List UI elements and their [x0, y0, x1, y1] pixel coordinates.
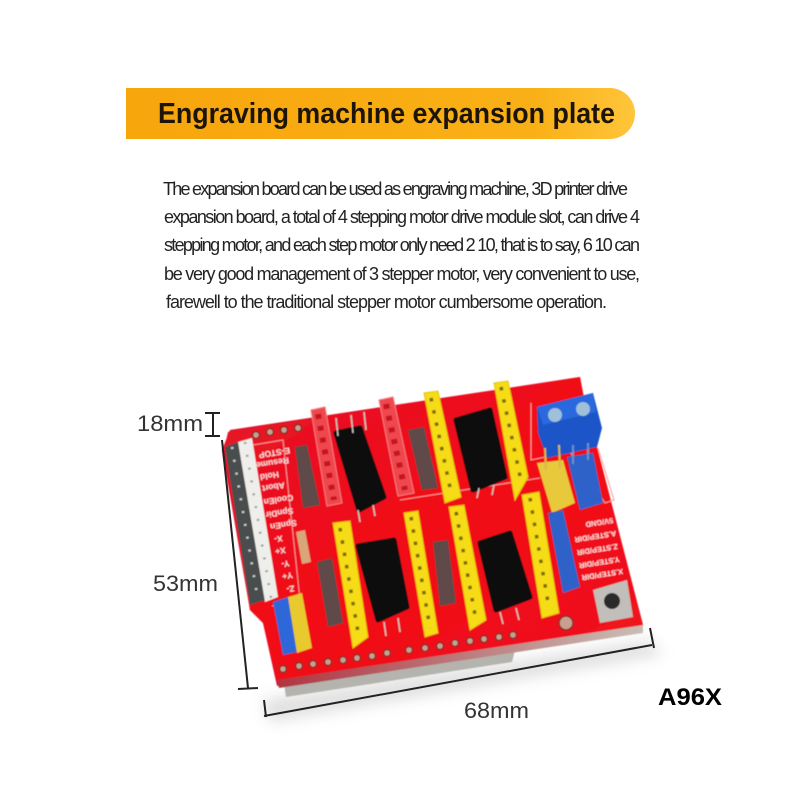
dimension: 68mm: 68mm [464, 698, 529, 723]
endstop silkscreen labels: X+ [274, 545, 287, 557]
dimension: 53mm [153, 440, 258, 689]
description paragraph: stepping motor, and each step motor only need 2 10, that is to say, 6 10 can [164, 235, 640, 255]
left grey header [225, 442, 265, 605]
small dark header 1 [295, 445, 320, 508]
description paragraph: farewell to the traditional stepper motor cumbersome operation. [166, 292, 607, 312]
endstop silkscreen labels: Hold [259, 470, 280, 482]
step dir silkscreen labels: Z.STEP/DIR [576, 542, 618, 557]
endstop silkscreen labels: Y+ [281, 570, 294, 582]
blue pin block lower [548, 510, 580, 593]
description paragraph [163, 179, 640, 312]
small dark header 4 [433, 540, 456, 606]
blue pin block upper [567, 453, 603, 510]
endstop silkscreen labels: Z- [286, 583, 295, 595]
small dark header 3 [317, 558, 343, 627]
upright pins [545, 443, 588, 470]
yellow pin block [537, 460, 575, 513]
pink headers [311, 397, 414, 506]
left white header [238, 438, 278, 602]
bottom yellow header [288, 593, 312, 653]
description paragraph: expansion board, a total of 4 stepping motor drive module slot, can drive 4 [164, 207, 640, 227]
dimension: 53mm: 53mm [153, 571, 218, 596]
endstop silkscreen labels: Abort [261, 480, 285, 494]
bottom pins [284, 650, 515, 697]
dimension: 68mm [264, 628, 654, 723]
board shadow [262, 640, 662, 722]
driver pins [336, 412, 519, 636]
pcb bottom edge [277, 625, 643, 688]
title banner: Engraving machine expansion plate [158, 98, 615, 130]
silkscreen frames [253, 403, 614, 606]
PCB [222, 377, 643, 686]
step dir silkscreen labels: Y.STEP/DIR [578, 555, 620, 570]
description paragraph: be very good management of 3 stepper motor, very convenient to use, [164, 264, 640, 284]
step dir silkscreen labels: A.STEP/DIR [573, 529, 617, 544]
reset button [593, 580, 633, 623]
endstop silkscreen labels: Y- [281, 558, 290, 570]
step dir silkscreen labels: 5V/GND [584, 516, 614, 529]
stepper driver modules [336, 410, 530, 620]
endstop silkscreen labels: SpnEn [269, 518, 298, 532]
step dir silkscreen labels [573, 516, 624, 582]
bottom blue header [273, 597, 297, 655]
endstop silkscreen labels: CoolEn [263, 493, 294, 507]
dimension: 18mm: 18mm [137, 411, 203, 436]
title banner [126, 88, 635, 139]
endstop silkscreen labels: SpnDir [264, 506, 294, 520]
endstop silkscreen labels: Resume [255, 455, 290, 471]
endstop silkscreen labels: E-STOP [258, 446, 291, 460]
mounting holes row [252, 424, 573, 672]
model code: A96X [658, 684, 722, 711]
blue terminal block [537, 393, 602, 458]
left pin dots [232, 442, 271, 600]
description paragraph: The expansion board can be used as engraving machine, 3D printer drive [163, 179, 628, 199]
small dark header 2 [408, 427, 438, 490]
endstop silkscreen labels: X- [273, 533, 283, 545]
endstop silkscreen labels [255, 446, 298, 595]
board photo: CNC shield [222, 377, 662, 722]
step dir silkscreen labels: X.STEP/DIR [581, 567, 624, 582]
yellow socket headers [333, 381, 559, 648]
resistor [296, 530, 311, 564]
